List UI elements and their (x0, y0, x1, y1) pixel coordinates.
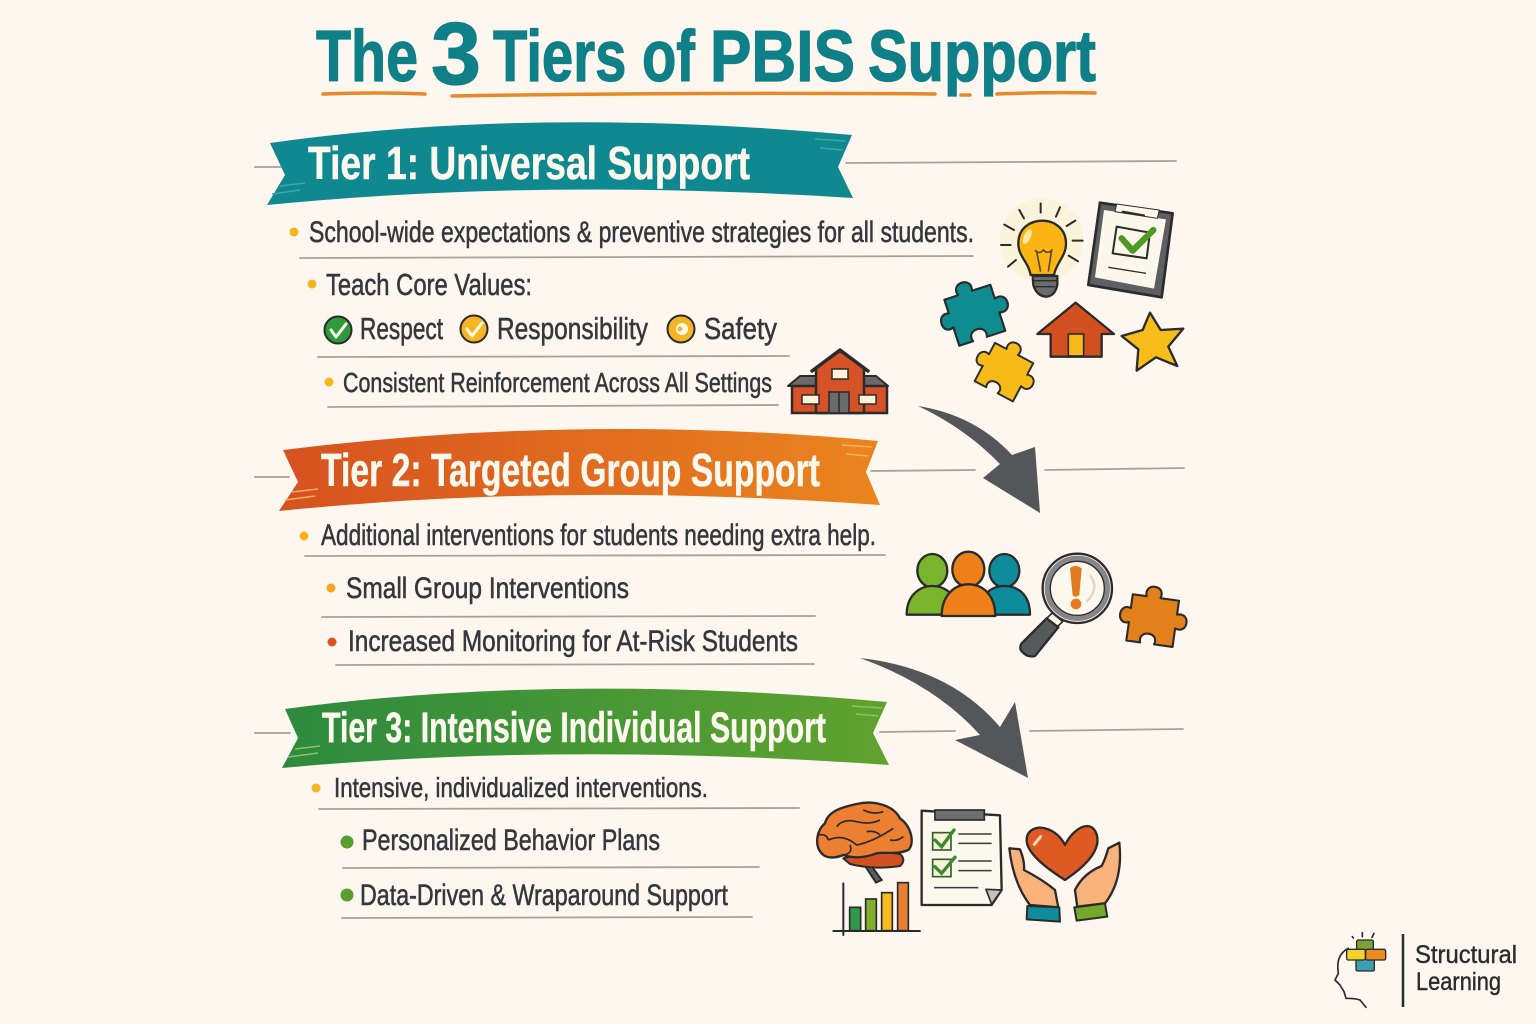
core values row: Responsibility (497, 311, 648, 346)
bullet: consistent reinforcement: Consistent Reinforcement Across All Settings (343, 367, 772, 398)
icon: three people (907, 552, 1030, 616)
title: Tiers of (493, 17, 696, 97)
bullet: teach core values: Teach Core Values: (326, 267, 532, 302)
bullet: data-driven support: Data-Driven & Wraparound Support (360, 879, 729, 912)
bullet: additional interventions: Additional interventions for students needing extra help. (321, 519, 876, 552)
icon: checklist document (922, 810, 1002, 905)
core values row (318, 311, 789, 357)
bullet: personalized behavior plans (340, 824, 759, 868)
bullet: consistent reinforcement (324, 367, 778, 407)
bullet: small group interventions (322, 572, 815, 617)
tier 1 banner: Tier 1: Universal Support (308, 137, 750, 189)
panel: tier 2 (255, 429, 1191, 665)
icon: respect check (324, 316, 352, 344)
bullet: school-wide expectations: School-wide expectations & preventive strategies for all students. (309, 216, 974, 249)
bullet: data-driven support (340, 879, 752, 918)
logo: Structural Learning: Learning (1416, 968, 1501, 996)
arrow: tier 2 to tier 3 (860, 658, 1028, 778)
tier 1 banner (267, 122, 853, 205)
icon: house (1037, 303, 1114, 357)
icon: light bulb (1000, 198, 1083, 297)
icon cluster: tier 1 (931, 198, 1183, 406)
icon: safety swirl (668, 316, 694, 342)
panel: tier 1 (255, 122, 1183, 413)
icon: school building (788, 350, 888, 413)
icon: orange puzzle piece (1117, 583, 1191, 648)
icon: magnifying glass with exclamation (1020, 554, 1112, 656)
bullet: increased monitoring: Increased Monitoring for At-Risk Students (348, 625, 798, 658)
tier 3 banner: Tier 3: Intensive Individual Support (322, 704, 826, 752)
bullet: additional interventions (300, 519, 885, 556)
icon: teal puzzle piece (931, 271, 1016, 349)
icon cluster: tier 2 (907, 552, 1191, 656)
bullet: personalized behavior plans: Personalized Behavior Plans (362, 824, 660, 857)
logo: Structural Learning (1335, 933, 1517, 1007)
icon: bar chart (833, 883, 920, 935)
title (316, 4, 1096, 103)
icon: yellow puzzle piece (967, 330, 1046, 406)
title: The (316, 17, 418, 97)
icon: brain (817, 803, 912, 883)
icon cluster: tier 3 (817, 803, 1120, 935)
tier 3 banner (282, 689, 889, 768)
icon: head with blocks (1335, 933, 1386, 1007)
title: PBIS (710, 17, 855, 97)
bullet: school-wide expectations (290, 216, 974, 258)
icon: responsibility check (460, 316, 488, 342)
core values row: Safety (704, 311, 777, 346)
tier 2 banner (279, 429, 880, 511)
logo: Structural Learning: Structural (1415, 941, 1517, 969)
core values row: Respect (360, 311, 443, 346)
bullet: intensive interventions: Intensive, individualized interventions. (334, 772, 708, 803)
tier 2 banner: Tier 2: Targeted Group Support (321, 444, 820, 496)
panel: tier 3 (255, 689, 1183, 935)
arrow: tier 1 to tier 2 (918, 406, 1040, 513)
bullet: increased monitoring (328, 625, 814, 665)
bullet: small group interventions: Small Group Interventions (346, 572, 629, 605)
title: 3 (431, 4, 481, 103)
icon: star (1122, 313, 1183, 371)
icon: clipboard check (1088, 203, 1173, 297)
title: Support (868, 17, 1096, 97)
icon: heart in hands (1009, 826, 1120, 922)
